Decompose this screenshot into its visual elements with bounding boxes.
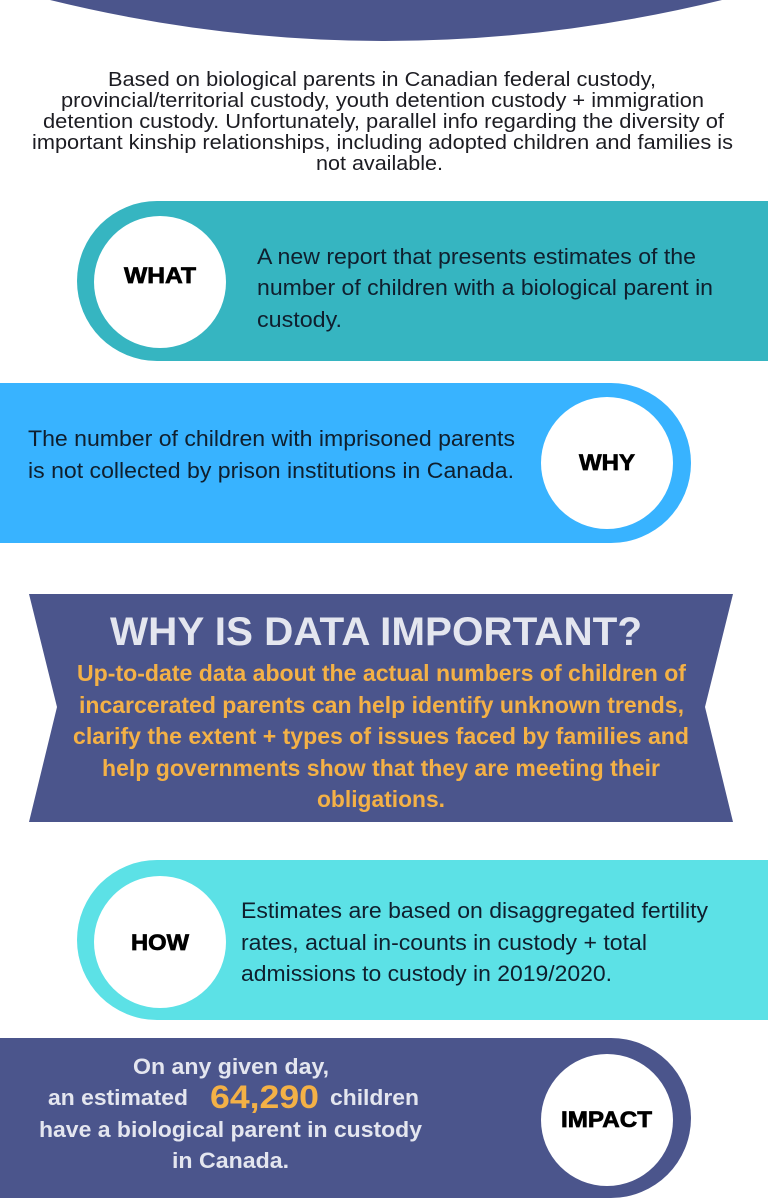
intro text block: not available. [316,153,443,175]
panel: impact: have a biological parent in custody [39,1117,422,1142]
panel: what: number of children with a biological parent in [257,275,713,300]
panel: why is data important: obligations. [317,786,445,812]
panel: how [77,860,768,1020]
panel: what: A new report that presents estimates of the [257,244,696,269]
intro text block [32,69,733,175]
panel: why is data important: help governments show that they are meeting their [102,755,660,781]
panel: how: Estimates are based on disaggregated fertility [241,898,708,923]
panel: why is data important [29,594,733,822]
panel: how: rates, actual in-counts in custody + total [241,930,647,955]
panel: impact: 64,290 [210,1079,319,1115]
panel: why is data important: clarify the extent + types of issues faced by families and [73,723,689,749]
panel: how: HOW [131,930,189,955]
panel: why: The number of children with imprisoned parents [28,426,515,451]
panel: impact: IMPACT [561,1107,653,1132]
intro text block: Based on biological parents in Canadian federal custody, [108,69,656,91]
intro text block: provincial/territorial custody, youth detention custody + immigration [61,90,704,112]
panel: why is data important: incarcerated parents can help identify unknown trends, [79,692,684,718]
panel: why: is not collected by prison institutions in Canada. [28,458,514,483]
panel: why is data important: WHY IS DATA IMPORTANT? [110,610,642,654]
panel: impact: children [330,1085,419,1110]
panel: impact: On any given day, [133,1054,329,1079]
header arch [50,0,722,41]
panel: why [0,383,691,543]
intro text block: important kinship relationships, including adopted children and families is [32,132,733,154]
panel: what: WHAT [124,263,197,288]
panel: what [77,201,768,361]
panel: impact: an estimated [48,1085,188,1110]
panel: how: admissions to custody in 2019/2020. [241,961,612,986]
panel: why is data important: Up-to-date data about the actual numbers of children of [77,660,686,686]
intro text block: detention custody. Unfortunately, parallel info regarding the diversity of [43,111,724,133]
panel: why: WHY [579,450,635,475]
panel: what: custody. [257,307,342,332]
panel: impact [0,1038,691,1198]
panel: impact: in Canada. [172,1148,289,1173]
